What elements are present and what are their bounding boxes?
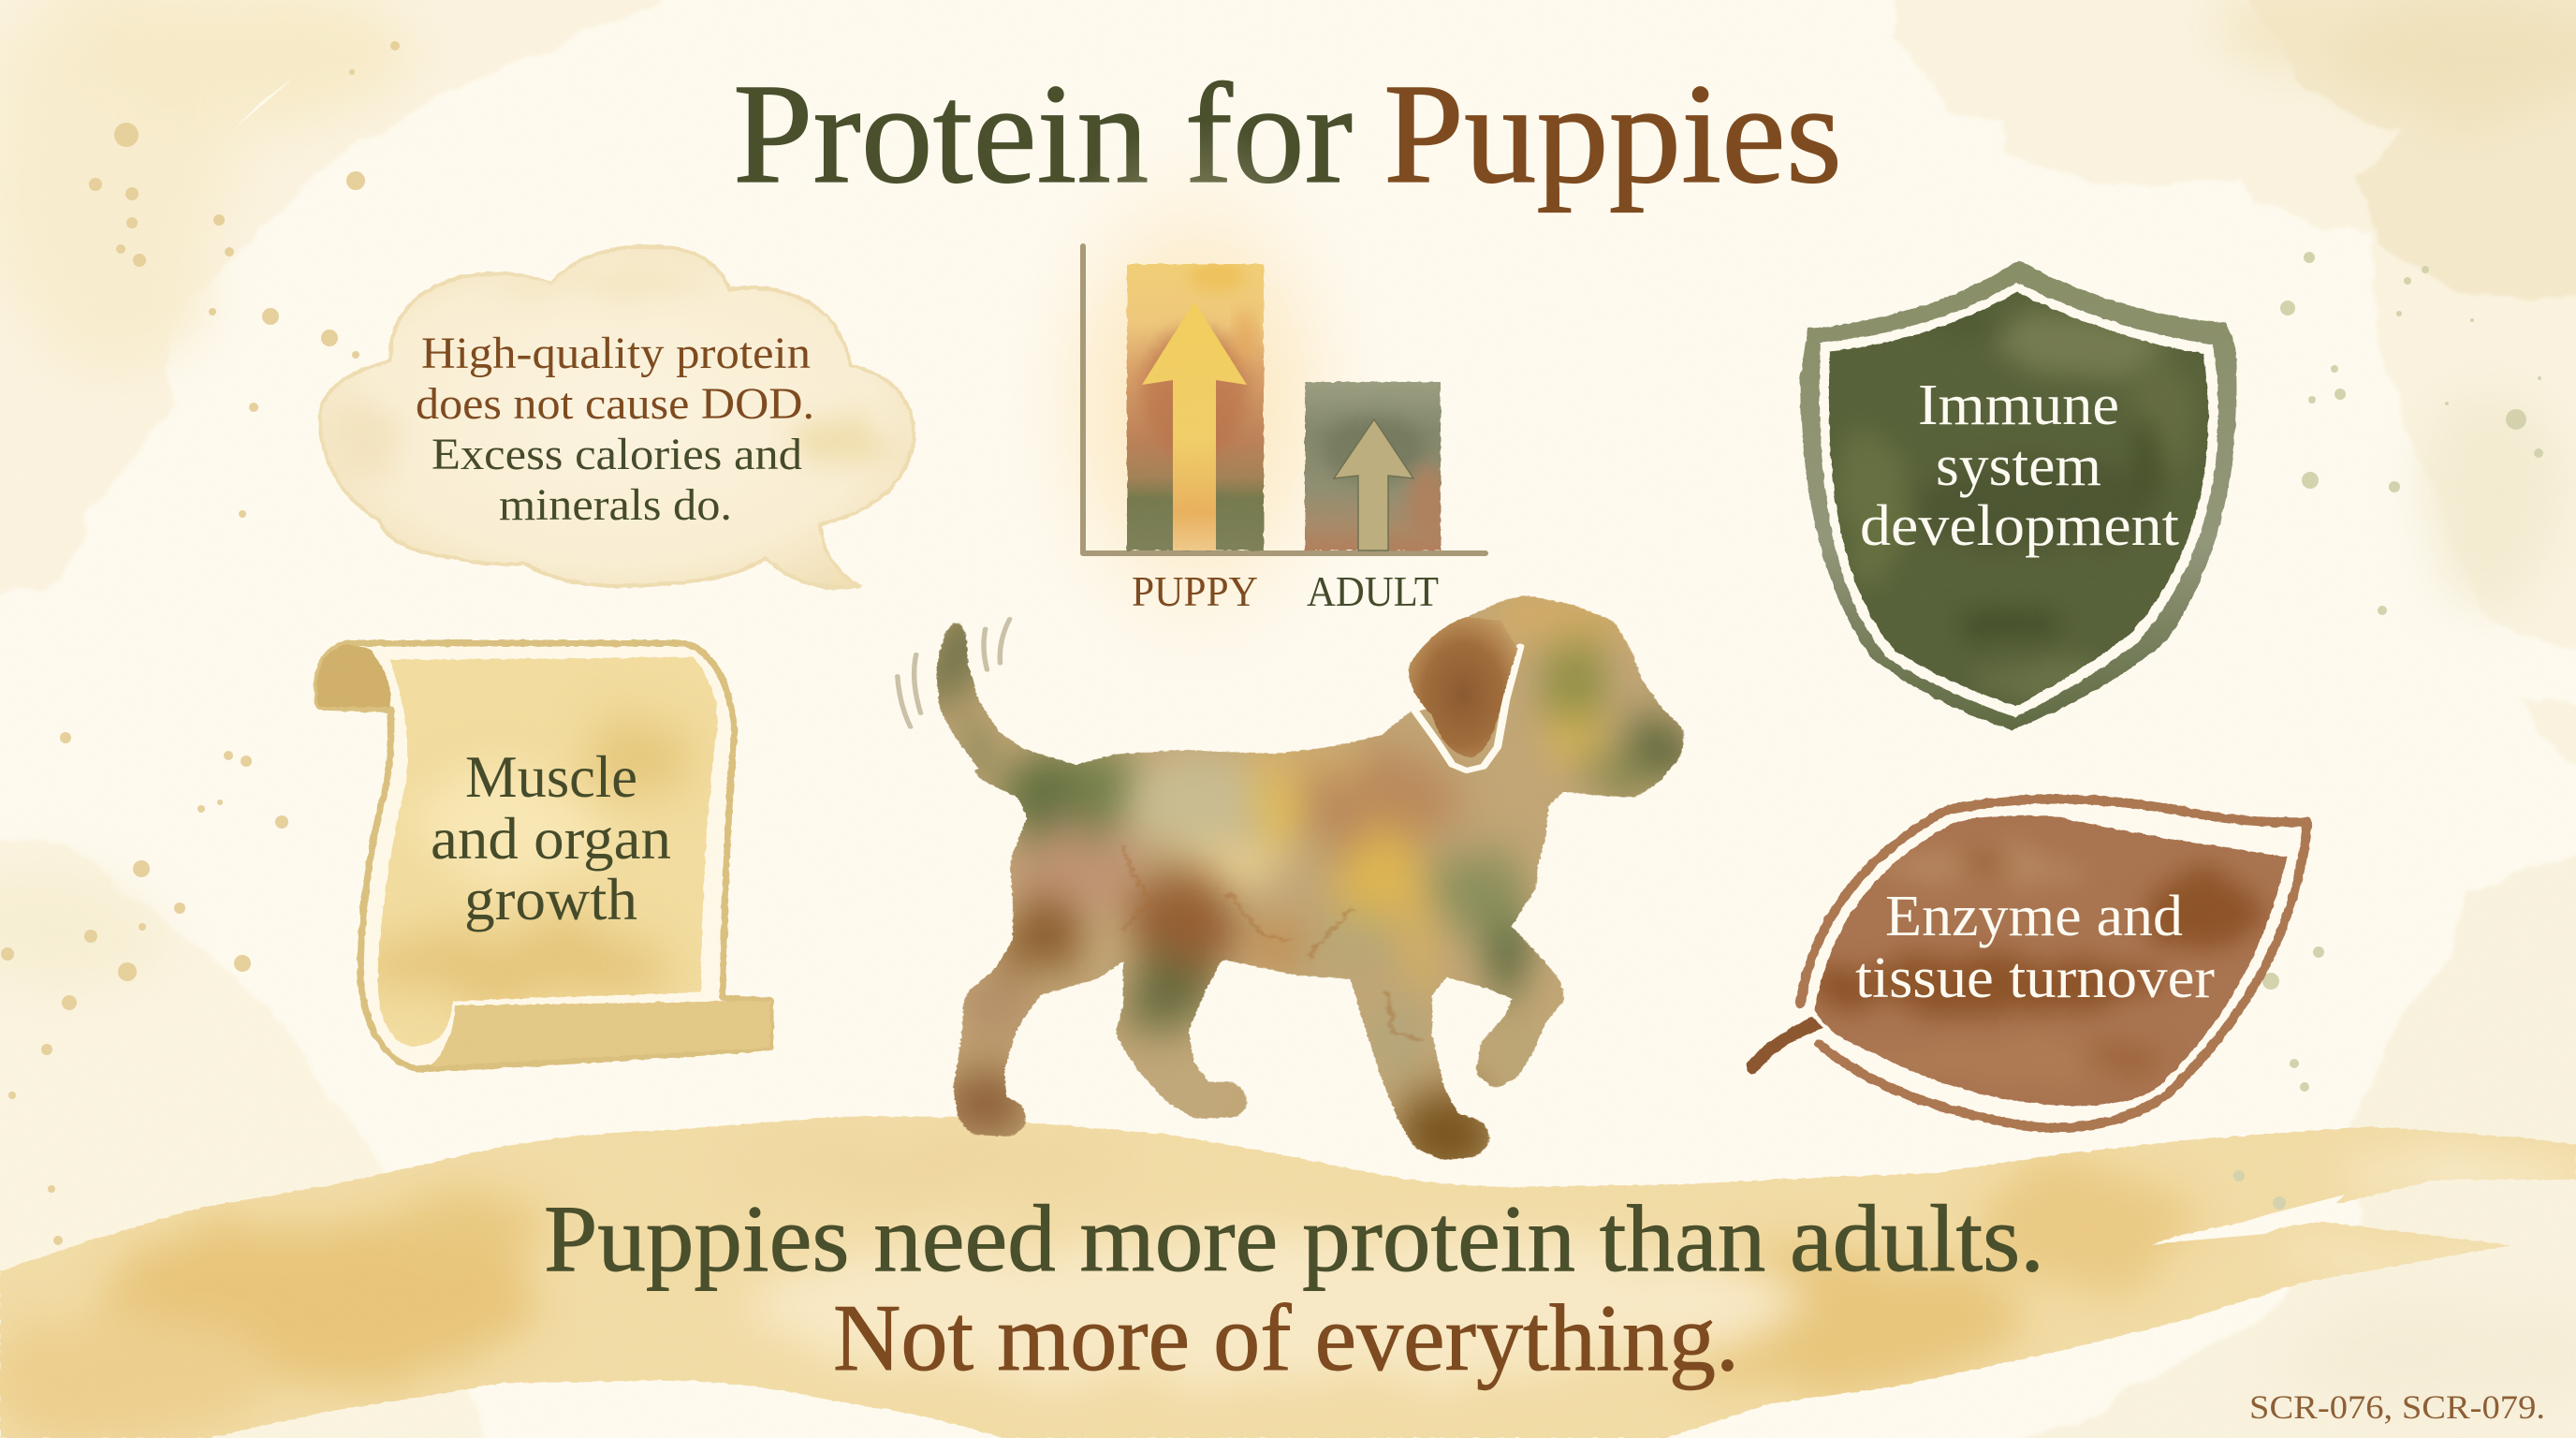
chart glow <box>1003 122 1387 683</box>
scroll curl <box>317 644 390 707</box>
adult label: ADULT <box>1307 567 1439 615</box>
bottom watercolor band <box>0 1105 2576 1438</box>
chart axes <box>1083 246 1486 553</box>
leaf text: Enzyme and <box>1885 885 2183 948</box>
dog body <box>922 589 1699 1181</box>
puppy arrow <box>1142 301 1247 550</box>
shield panel: immune system development: development <box>1860 494 2179 558</box>
leaf outline <box>1800 799 2307 1128</box>
paint splatter dots <box>1 41 400 1245</box>
title <box>733 55 1842 213</box>
speech bubble callout <box>319 246 915 588</box>
title: Protein for <box>733 55 1353 213</box>
bubble shape <box>319 246 915 588</box>
leaf body <box>1807 805 2293 1114</box>
scroll panel: muscle and organ growth <box>317 643 770 1069</box>
light brush streak <box>234 77 295 129</box>
watercolor puppy silhouette <box>898 589 1699 1181</box>
shield panel: immune system development <box>1800 260 2236 730</box>
scroll outline <box>317 643 770 1069</box>
takeaway text: Not more of everything. <box>833 1285 1739 1391</box>
tail wag marks <box>898 619 1010 727</box>
scroll panel: muscle and organ growth: and organ <box>431 806 671 872</box>
dog ear <box>1409 617 1517 757</box>
speech bubble callout: minerals do. <box>499 480 732 530</box>
scroll panel: muscle and organ growth: growth <box>464 867 637 932</box>
source citation: SCR-076, SCR-079. <box>2249 1388 2545 1426</box>
scroll text: Muscle <box>465 744 637 810</box>
takeaway text <box>544 1186 2044 1391</box>
puppy label: PUPPY <box>1132 567 1258 615</box>
shield panel: immune system development: system <box>1936 434 2101 498</box>
leaf panel: enzyme and tissue turnover: tissue turnover <box>1855 946 2215 1010</box>
bar chart: puppy versus adult protein <box>1083 246 1486 615</box>
paint splatter dots right <box>2233 252 2543 1210</box>
white gap in band <box>2181 1195 2345 1241</box>
leaf panel: enzyme and tissue turnover <box>1747 799 2307 1128</box>
shield white ring <box>1820 283 2218 717</box>
adult arrow <box>1334 419 1413 550</box>
speech bubble callout: Excess calories and <box>432 430 802 479</box>
title: Puppies <box>1383 55 1842 213</box>
bubble text: High-quality protein <box>421 329 811 378</box>
speech bubble callout: does not cause DOD. <box>416 379 814 429</box>
shield face <box>1816 281 2218 721</box>
leaf stem <box>1747 1017 1823 1074</box>
watercolor veins <box>1120 845 1421 1040</box>
neck and ear gap <box>1415 646 1520 770</box>
adult bar <box>1305 382 1449 550</box>
scroll page <box>365 646 739 1058</box>
shield text: Immune <box>1918 374 2119 437</box>
scroll bottom strip <box>430 1001 770 1066</box>
takeaway text: Puppies need more protein than adults. <box>544 1186 2044 1292</box>
puppy bar <box>1127 261 1264 550</box>
shield rim <box>1800 260 2236 730</box>
